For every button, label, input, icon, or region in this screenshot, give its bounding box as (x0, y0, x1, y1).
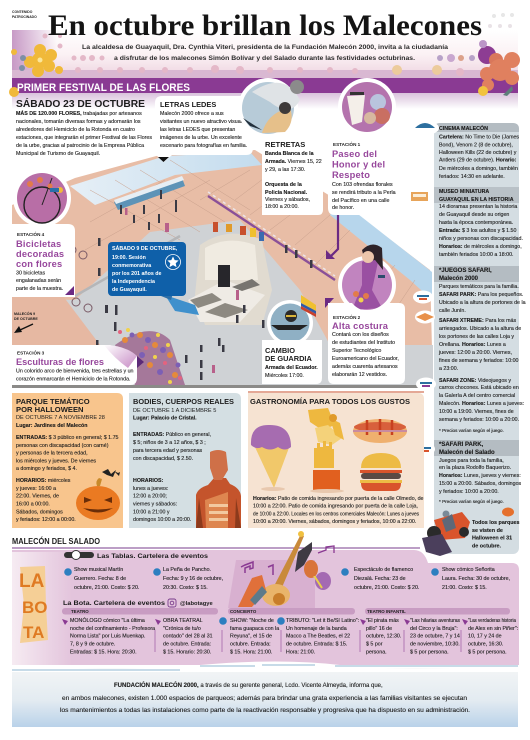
icon: safari logos (413, 290, 436, 456)
callout: sabado 9 de octubre: 19:00. Sesión (112, 255, 146, 261)
panel: footer: los mantenimientos a todas las instalaciones como parte de la reactivación responsable y progresiva que ha dispuesto en su administración. (60, 708, 470, 714)
card: estacion 1 paseo del honor: Honor y del (332, 160, 385, 170)
museo miniatura: Entrada: $ 3 los adultos y $ 1.50 (439, 228, 516, 234)
logo: la bota: BO (22, 598, 48, 617)
juegos safari: a 23:00. (439, 366, 458, 372)
las tablas events: Laura. Fecha: 30 de octubre, (442, 576, 510, 582)
section heading: primer festival: PRIMER FESTIVAL DE LAS FLORES (17, 82, 190, 94)
halloween note: Todos los parques (472, 520, 520, 526)
card: retretas: Policía Nacional. (265, 190, 308, 196)
museo miniatura: Horarios: de miércoles a domingo, (439, 244, 522, 250)
icon: museo logo (411, 192, 428, 201)
la bota events: del Circo y la Bruja": (410, 626, 458, 632)
la bota events: 23 de octubre, 7 y 14 (410, 634, 460, 640)
card: estacion 2 alta costura: además cuarenta artesanos (332, 364, 398, 370)
la bota events: de noviembre, 10:30. (410, 642, 460, 648)
panel: footer: en ambos malecones, existen 1.000 espacios de parqueos; además para brindar una grata experiencia a las familias visitantes se ejecutan (62, 696, 467, 702)
juegos safari: Malecón. Horarios: Lunes a jueves: (439, 401, 524, 407)
card: cambio de guardia (262, 340, 322, 384)
card: estacion 2 alta costura (328, 303, 405, 384)
juegos safari: SAFARI ZONE: Videojuegos y (439, 378, 511, 384)
panel: parque tematico halloween: y personas de la tercera edad, (16, 450, 88, 456)
logo: la bota: LA (19, 571, 45, 592)
card: estacion 1 paseo del honor (328, 135, 398, 215)
la bota events: "Crónica de tu/o (163, 626, 201, 632)
small credit: CONTENIDO (12, 10, 33, 14)
las tablas events: La Peña de Pancho. (163, 567, 211, 573)
safari park: Horarios: Lunes, jueves y viernes: (439, 473, 521, 479)
la bota events: $ 15. Horario: 20:30. (163, 650, 211, 656)
panel: footer: FUNDACIÓN MALECÓN 2000, (114, 681, 199, 689)
left intro: sabado 23 de octubre: SÁBADO 23 DE OCTUBRE (16, 97, 145, 110)
card: estacion 3 esculturas: Un colorido arco de bienvenida, tres estrellas y un (16, 368, 134, 374)
juegos safari: Parques temáticos para la familia. (439, 284, 519, 290)
callout: sabado 9 de octubre: la Independencia (112, 279, 155, 285)
gastronomia horarios: de 10:00 a 22:00. Locales en los centros comerciales Malecón: Lunes a jueves (253, 512, 419, 518)
card: estacion 4 bicicletas: ESTACIÓN 4 (17, 230, 45, 237)
panel: bodies: viernes y sábados: (133, 502, 177, 508)
card: estacion 2 alta costura: Euroamericano del Ecuador, (332, 356, 399, 362)
icon: retretas circle (238, 78, 304, 138)
juegos safari: 10:00 a 19:00. Viernes, fines de (439, 409, 514, 415)
icon: corn nuggets (308, 408, 344, 445)
juegos safari: carros chocones. Está ubicado en (439, 385, 519, 391)
safari park: Juegos para toda la familia, (439, 458, 504, 464)
card: estacion 2 alta costura: elaborarán 12 vestidos. (332, 372, 387, 378)
juegos safari: arriesgados. Ubicado a la altura de (439, 326, 521, 332)
flower sculptures (115, 328, 185, 385)
la bota events: $ 5 por persona. (468, 650, 507, 656)
card: estacion 3 esculturas: corazón enmarcarán el Hemiciclo de la Rotonda. (16, 376, 131, 382)
logo: la bota: TA (23, 623, 44, 642)
museo miniatura: también feriados 10:00 a 18:00. (439, 252, 514, 258)
card: retretas: Banda Blanca de la (265, 151, 314, 157)
panel: bodies: domingos 10:00 a 20:00. (133, 517, 191, 523)
panel: bodies (129, 393, 241, 528)
las tablas events: 21:00. Costo: $ 15. (442, 585, 487, 591)
callout: sabado 9 de octubre: por los 201 años de (112, 271, 162, 277)
illustration: music instruments (238, 531, 334, 607)
card: estacion 4 bicicletas: con flores (16, 259, 62, 269)
icon: alta costura circle (338, 244, 396, 314)
callout: sabado 9 de octubre: conmemorativa (112, 263, 151, 269)
la bota events: $ 5 por persona. (410, 650, 449, 656)
card: estacion 4 bicicletas: Bicicletas (16, 239, 61, 249)
card: letras ledes (155, 96, 253, 162)
panel: bodies: con discapacidad, $ 2.50. (133, 456, 193, 462)
panel: parque tematico halloween: personas con discapacidad (con carné) (16, 443, 109, 449)
las tablas events: Fecha: 9 y 16 de octubre, (163, 576, 223, 582)
panel: parque tematico halloween: ENTRADAS: $ 3 público en general; $ 1.75 (16, 435, 118, 441)
la bota category strips: CONCIERTO (230, 609, 257, 614)
logo: la bota (19, 566, 48, 643)
illustration: muscle body (196, 450, 241, 528)
panel: right column (434, 123, 526, 554)
heading: las tablas: Las Tablas. Cartelera de eventos (97, 553, 208, 560)
juegos safari: jueves: 12:00 a 20:00. Viernes, (438, 350, 512, 356)
card: letras ledes: escenario para fotografías en familia. (160, 143, 247, 149)
callout: sabado 9 de octubre: de Guayaquil. (112, 287, 147, 293)
juegos safari: *JUEGOS SAFARI, (439, 268, 492, 274)
icon: pumpkin (76, 469, 120, 520)
left intro: sabado 23 de octubre: alrededores del Hemiciclo de la Rotonda en cuatro (16, 127, 135, 133)
museo miniatura: hasta la época contemporánea. (439, 220, 513, 226)
card: estacion 1 paseo del honor: se rendirá tributo a la Perla (332, 190, 396, 196)
illustration: kart (422, 508, 514, 556)
right column header bands (434, 123, 519, 456)
juegos safari: * Precios varían según el juego. (439, 428, 504, 433)
la bota events: 10, 17 y 24 de (468, 634, 502, 640)
cinema malecon: Halloween Kills (22 de octubre) y (439, 150, 517, 156)
panel: bodies: $ 5; niños de 3 a 12 años, $ 3 ; (133, 440, 206, 446)
las tablas events: Diezalá. Fecha: 23 de (354, 576, 406, 582)
gastronomia horarios: 10:00 a 20:00. Viernes, sábados, domingos y feriados, 10:00 a 22:00. (253, 519, 416, 525)
card: retretas: Viernes y sábados, (265, 197, 310, 203)
la bota events: de Alex en sin Piñer": (468, 626, 518, 632)
map illustration (12, 150, 433, 388)
panel: parque tematico halloween: HORARIOS: miércoles (16, 478, 70, 484)
icon: malecon logo (411, 121, 439, 135)
heading: la bota: La Bota. Cartelera de eventos (63, 600, 165, 607)
card: letras ledes: imágenes de la urbe. Un excelente (160, 135, 242, 141)
card: letras ledes: Malecón 2000 ofrece a sus (160, 111, 224, 117)
la bota category strips: TEATRO INFANTIL (367, 609, 406, 614)
la bota events: Macco a The Beatles, el 22 (286, 634, 350, 640)
card: cambio de guardia: CAMBIO (265, 346, 295, 355)
icon: instagram (168, 599, 176, 607)
safari park: y feriados: 10:00 a 20:00. (439, 489, 499, 495)
left intro: sabado 23 de octubre: estaciones, que integrarán el primer Festival de las Flores (16, 135, 152, 141)
cinema malecon: Bond), Venom 2 (8 de octubre), (439, 142, 513, 148)
icon: fries (310, 441, 344, 493)
card: estacion 2 alta costura: de estudiantes del Instituto (332, 340, 395, 346)
card: cambio de guardia: DE GUARDIA (265, 354, 312, 363)
card: retretas: 18:00 a 20:00. (265, 204, 299, 210)
cinema malecon: CINEMA MALECÓN (439, 124, 488, 132)
la bota events: contado" del 28 al 31 (163, 634, 213, 640)
museo miniatura: de Guayaquil desde su origen (439, 212, 509, 218)
museo miniatura: MUSEO MINIATURA (439, 189, 489, 195)
las tablas events: Espectáculo de flamenco (354, 567, 413, 573)
safari park: en la plaza Rodolfo Baquerizo. (439, 465, 511, 471)
purple flower line (208, 196, 335, 280)
heading: malecon del salado: MALECÓN DEL SALADO (12, 535, 100, 546)
letters sign (114, 178, 185, 210)
la bota events: Norma Lista" por Luis Muenkap. (70, 634, 145, 640)
la bota events: octubre. Entrada: (230, 642, 271, 648)
card: estacion 1 paseo del honor: ESTACIÓN 1 (333, 140, 361, 147)
header background band (12, 13, 518, 109)
cinema malecon: Antlers (29 de octubre). Horario: (439, 158, 516, 164)
card: letras ledes: las letras LEDES que presentan (160, 127, 235, 133)
las tablas events: 20:30. Costo: $ 15. (163, 585, 208, 591)
las tablas events (64, 567, 510, 591)
title: En octubre brillan los Malecones (48, 9, 482, 42)
safari park: 15:00 a 20:00. Sábados, domingos (439, 481, 522, 487)
logo las tablas (64, 550, 94, 560)
museo miniatura: 14 dioramas presentan la historia (439, 204, 517, 210)
la bota events: persona. (366, 650, 387, 656)
safari park: * Precios varían según el juego. (439, 499, 504, 504)
panel: gastronomia: GASTRONOMÍA PARA TODOS LOS GUSTOS (250, 397, 410, 406)
la bota events: TRIBUTO: "Let it Be/Sí Latino": (286, 618, 359, 624)
bikes (68, 246, 92, 312)
intro text: a disfrutar de los malecones Simón Bolívar y del Salado durante las festividades octubrinas. (114, 55, 415, 62)
la bota events (62, 617, 518, 656)
callout: sabado 9 de octubre: SÁBADO 9 DE OCTUBRE, (112, 245, 178, 252)
icon: cambio de guardia circle (267, 300, 313, 346)
card: estacion 4 bicicletas: 30 bicicletas (16, 270, 45, 276)
left intro: sabado 23 de octubre (16, 97, 152, 157)
museo miniatura: niños y personas con discapacidad. (439, 236, 523, 242)
panel: bodies: Lugar: Palacio de Cristal. (133, 416, 197, 422)
panel: bodies: BODIES, CUERPOS REALES (133, 397, 234, 406)
panel: parque tematico halloween (12, 393, 123, 528)
panel: parque tematico halloween: y feriados: 12:00 a 00:00. (16, 517, 76, 523)
la bota events: octubre, 12:30. (366, 634, 401, 640)
juegos safari: Malecón 2000 (439, 276, 479, 282)
la bota events: Hora: 21:00. (286, 650, 315, 656)
card: letras ledes: LETRAS LEDES (160, 100, 216, 109)
left intro: sabado 23 de octubre: trabajadas por artesanos (82, 111, 142, 117)
panel: bodies: ENTRADAS: Público en general, (133, 432, 211, 438)
panel: parque tematico halloween: los miércoles y jueves. De viernes (16, 458, 96, 464)
la bota events: "Las verdaderas historia (468, 618, 516, 624)
left intro: sabado 23 de octubre: nacionales, tomarán diversas formas y adornarán los (16, 119, 141, 125)
icon: flores circle (338, 78, 396, 136)
cinema malecon: feriados: 14:30 en adelante. (439, 174, 505, 180)
panel: parque tematico halloween: a domingo y feriados, $ 4. (16, 466, 77, 472)
panel: parque tematico halloween: Lugar: Jardines del Malecón (16, 423, 88, 429)
la bota events: de octubre. Entrada: $ 15. (286, 642, 347, 648)
icon: yellow flowers left (9, 44, 63, 97)
left intro: sabado 23 de octubre: Municipal de Turismo de Guayaquil. (16, 151, 100, 157)
arrow: malecon 9 de octubre (14, 311, 38, 333)
cinema malecon: De miércoles a domingo, también (439, 166, 518, 172)
las tablas events: Show musical Martín (74, 567, 123, 573)
la bota events: MONÓLOGO cómico "La última (70, 617, 145, 624)
safari park: Malecón del Salado (439, 450, 495, 456)
left intro: sabado 23 de octubre: MÁS DE 120.000 FLORES, (16, 110, 82, 117)
halloween note: Halloween el 31 (472, 536, 512, 542)
la bota events: 7, 8 y 9 de octubre. (70, 642, 115, 648)
card: estacion 1 paseo del honor: Respeto (332, 170, 370, 180)
panel: gastronomia (248, 392, 424, 528)
juegos safari: calle Junín. (439, 308, 466, 314)
la bota events: SHOW: "Noche de (230, 618, 274, 624)
icon: hot dog (353, 419, 407, 443)
las tablas events: Guerrero. Fecha: 8 de (74, 576, 126, 582)
card: estacion 4 bicicletas: decoradas (16, 249, 64, 259)
la bota events: octubre, 16:30. (468, 642, 503, 648)
card: cambio de guardia: Miércoles 17:00. (265, 373, 304, 379)
panel: malecon del salado (12, 531, 519, 665)
arrow: estacion 1 (331, 215, 338, 256)
flag ecuador (301, 295, 316, 317)
juegos safari: Ubicado a la altura de portones de la (439, 300, 526, 306)
la bota events: Reyuna", el 15 de (230, 634, 272, 640)
juegos safari: la Galería A del centro comercial (439, 393, 515, 399)
la bota events: Un homenaje de la banda (286, 626, 347, 632)
card: retretas (262, 135, 323, 215)
arrowhead: estacion 2 (325, 298, 334, 308)
la bota category strips: TEATRO (71, 609, 89, 614)
panel: bodies: para tercera edad y personas (133, 448, 203, 454)
card: retretas: Armada. Viernes 15, 22 (265, 159, 322, 165)
la bota events: OBRA TEATRAL (163, 618, 203, 624)
gastronomia horarios: Horarios: Patio de comida ingresando por puerta de la calle Olmedo, de (253, 496, 423, 502)
cinema malecon: Cartelera: No Time to Die (James (439, 134, 519, 140)
panel: parque tematico halloween: y jueves: 16:00 a (16, 486, 56, 492)
juegos safari: SAFARI PARK: Para los pequeños. (439, 292, 523, 298)
card: estacion 4 bicicletas: engalanadas serán (16, 278, 61, 284)
arrow: malecon 9 de octubre: DE OCTUBRE (14, 317, 38, 321)
halloween note: de octubre. (472, 544, 502, 550)
las tablas events: octubre, 21:00. Costo: $ 20. (74, 585, 139, 591)
la bota events: pillo" 16 de (366, 626, 392, 632)
la bota events: fama guapaca con la (230, 626, 279, 632)
card: estacion 3 esculturas: ESTACIÓN 3 (17, 348, 45, 356)
card: estacion 3 esculturas (12, 345, 144, 385)
small credit: PATROCINADO (12, 15, 37, 19)
juegos safari: semana y feriados: 10:00 a 20:00. (439, 417, 519, 423)
panel: bodies: 12:00 a 20:00; (133, 494, 167, 500)
hemicycle monument (195, 234, 272, 325)
las tablas events: octubre, 21:00. Costo: $ 20. (354, 585, 419, 591)
juegos safari: los portones de las calles Loja y (439, 334, 514, 340)
card: estacion 4 bicicletas (12, 224, 75, 297)
pedestrians (96, 190, 312, 380)
panel: parque tematico halloween: Sábados, domingos (16, 510, 63, 516)
la bota events: de octubre. Entrada: (163, 642, 211, 648)
card: estacion 2 alta costura: Contará con los diseños (332, 332, 389, 338)
la bota events: $ 15. Hora: 21:00. (230, 650, 272, 656)
panel: parque tematico halloween: POR HALLOWEEN (16, 405, 84, 414)
la bota events: "Las hilarias aventuras (410, 618, 460, 624)
panel: bodies: DE OCTUBRE 1 A DICIEMBRE 5 (133, 408, 216, 414)
las tablas events: Show cómico Señorita (442, 567, 495, 573)
halloween note: se visten de (472, 528, 503, 534)
juegos safari: fines de semana y feriados: 10:00 (439, 358, 519, 364)
card: retretas: Orquesta de la (265, 182, 302, 188)
la bota events: Entradas: $ 15. Hora: 20:30. (70, 650, 137, 656)
intro text: La alcaldesa de Guayaquil, Dra. Cynthia Viteri, presidenta de la Fundación Malecón 2000, invita a la ciudadanía (82, 44, 448, 51)
left intro: sabado 23 de octubre: de la urbe, gracias al patrocinio de la Empresa Pública (16, 143, 144, 149)
panel: footer: a través de su gerente general, Lcdo. Vicente Almeyda, informa que, (199, 683, 383, 689)
panel: bodies: 10:00 a 21:00 y (133, 510, 170, 516)
callout: sabado 9 de octubre (108, 242, 186, 296)
panel: footer (12, 662, 518, 727)
panel: parque tematico halloween: PARQUE TEMÁTICO (16, 397, 90, 406)
panel: parque tematico halloween: 22:00. Viernes, de (16, 494, 59, 500)
handle: @labotagye (180, 601, 213, 607)
panel: bodies: lunes a jueves: (133, 486, 168, 492)
la bota events: "El pirata más (366, 618, 399, 624)
card: estacion 1 paseo del honor: del Pacífico en una calle (332, 198, 389, 204)
card: estacion 2 alta costura: Superior Tecnológico (332, 348, 381, 354)
card: estacion 1 paseo del honor: Paseo del (332, 149, 377, 159)
card: retretas: y 29, a las 17:30. (265, 167, 305, 173)
card: estacion 3 esculturas: Esculturas de flores (16, 357, 104, 367)
arrow: malecon 9 de octubre: MALECÓN 9 (14, 311, 35, 316)
flags (213, 222, 264, 241)
icon: ice cream (251, 425, 291, 491)
la bota category strips (62, 608, 510, 614)
card: estacion 4 bicicletas: parte de la muestra. (16, 286, 63, 292)
la bota events: $ 5 por (366, 642, 383, 648)
panel: parque tematico halloween: DE OCTUBRE 7 A NOVIEMBRE 28 (16, 415, 105, 421)
panel: bodies: HORARIOS: (133, 478, 164, 484)
juegos safari: Orellana. Horarios: Lunes a (439, 342, 506, 348)
card: estacion 2 alta costura: ESTACIÓN 2 (333, 313, 361, 320)
museo miniatura: GUAYAQUIL EN LA HISTORIA (439, 197, 514, 203)
card: retretas: RETRETAS (265, 140, 305, 149)
safari park: *SAFARI PARK, (439, 442, 484, 448)
arrowhead: estacion 1 (326, 250, 335, 259)
icon: bicicletas circle (13, 169, 71, 227)
la bota events: noche del confinamiento - Profesora (70, 626, 155, 632)
card: letras ledes: visitantes un nuevo atractivo visual, (160, 119, 243, 125)
gastronomia horarios: 10:00 a 22:00. Patio de comida ingresando por puerta de la calle Loja, (253, 504, 418, 510)
card: estacion 2 alta costura: Alta costura (332, 321, 389, 331)
card: estacion 1 paseo del honor: Con 103 ofrendas florales (332, 182, 393, 188)
icon: burger (360, 453, 402, 491)
card: estacion 1 paseo del honor: de honor. (332, 205, 354, 211)
juegos safari: SAFARI XTREME: Para los más (439, 318, 516, 324)
panel: parque tematico halloween: 16:00 a 00:00. (16, 502, 50, 508)
card: cambio de guardia: Armada del Ecuador. (265, 365, 318, 371)
icon: coral flowers right (478, 40, 520, 96)
